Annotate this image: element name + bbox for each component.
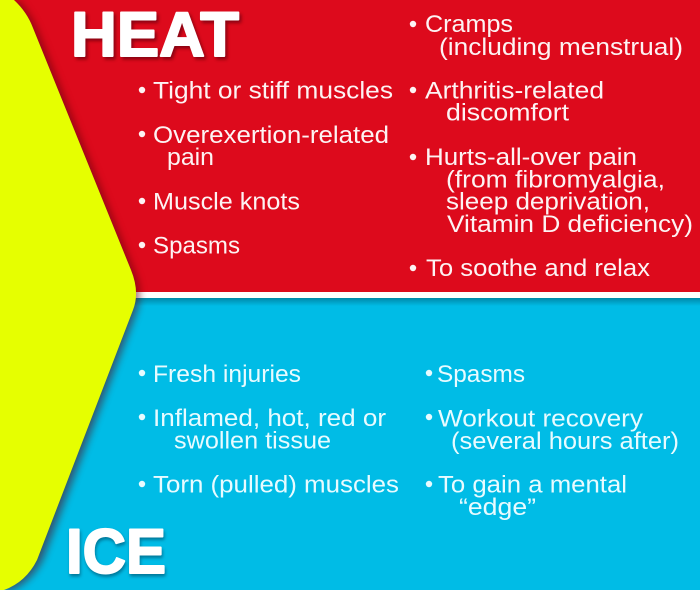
list: heat right column: Arthritis-related (425, 78, 604, 104)
list: heat left column: Spasms (153, 232, 240, 260)
heading: heat shadow: HEAT (73, 2, 241, 72)
list: ice right column: To gain a mental (438, 472, 627, 498)
list: ice left column: swollen tissue (174, 428, 331, 454)
heading: heat: HEAT (71, 0, 239, 70)
yellow arrow shadow (3, 1, 140, 590)
list: ice right column: “edge” (459, 494, 536, 521)
list: heat right column (410, 11, 693, 282)
list: heat right column: Cramps (425, 11, 513, 38)
divider shadow (130, 298, 700, 306)
heading: ice shadow: ICE (67, 520, 167, 590)
list: heat left column: Muscle knots (153, 188, 300, 216)
list: ice left column: Torn (pulled) muscles (153, 472, 399, 498)
list: ice left column: Fresh injuries (153, 361, 301, 388)
panel: ice content (66, 361, 679, 590)
list: heat left column: Overexertion-related (153, 122, 389, 149)
list: heat right column: Vitamin D deficiency) (447, 211, 693, 238)
white divider band (130, 292, 700, 298)
list: heat right column: (from fibromyalgia, (446, 166, 665, 194)
list: heat right column: Hurts-all-over pain (425, 144, 637, 171)
list: ice right column: (several hours after) (451, 428, 679, 455)
list: heat left column: pain (167, 144, 214, 171)
list: ice left column (139, 361, 399, 498)
panel: heat content (71, 0, 693, 282)
list: heat right column: sleep deprivation, (446, 188, 650, 216)
yellow arrow shape (0, 0, 136, 590)
list: heat left column: Tight or stiff muscles (153, 78, 393, 104)
heading: ice: ICE (66, 517, 166, 587)
panel: ice background (0, 298, 700, 590)
list: ice right column (426, 361, 679, 521)
list: heat right column: (including menstrual) (439, 34, 683, 61)
list: heat right column: To soothe and relax (426, 255, 650, 282)
list: heat right column: discomfort (446, 100, 569, 126)
list: ice right column: Spasms (437, 361, 525, 388)
list: ice right column: Workout recovery (438, 406, 643, 432)
list: ice left column: Inflamed, hot, red or (153, 405, 386, 432)
list: heat left column (139, 78, 393, 260)
panel: heat background (0, 0, 700, 292)
